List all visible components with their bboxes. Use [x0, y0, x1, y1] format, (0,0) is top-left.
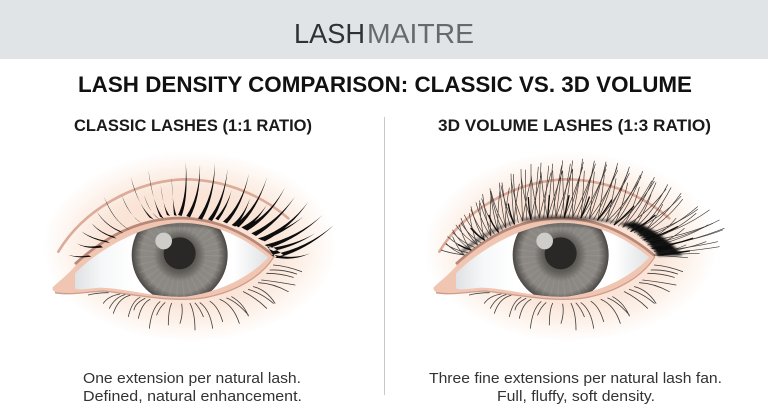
logo: LASH	[294, 18, 365, 49]
caption: volume	[429, 371, 722, 405]
heading: classic: CLASSIC LASHES (1:1 RATIO)	[74, 116, 312, 135]
caption: volume: Three fine extensions per natural lash fan.	[429, 371, 722, 387]
heading: volume: 3D VOLUME LASHES (1:3 RATIO)	[438, 116, 711, 135]
panel: 3D volume lashes	[424, 116, 724, 342]
illustration: volume eye	[424, 152, 724, 342]
caption: classic: One extension per natural lash.	[83, 371, 301, 387]
logo	[294, 18, 474, 49]
divider	[384, 117, 385, 395]
header band	[0, 0, 768, 59]
panel: classic lashes	[43, 116, 337, 342]
caption: classic: Defined, natural enhancement.	[83, 389, 302, 405]
logo: MAITRE	[367, 18, 474, 49]
caption: classic	[83, 371, 302, 405]
caption: volume: Full, fluffy, soft density.	[497, 389, 655, 405]
illustration: classic eye	[43, 152, 337, 342]
title: LASH DENSITY COMPARISON: CLASSIC VS. 3D VOLUME	[78, 72, 692, 97]
